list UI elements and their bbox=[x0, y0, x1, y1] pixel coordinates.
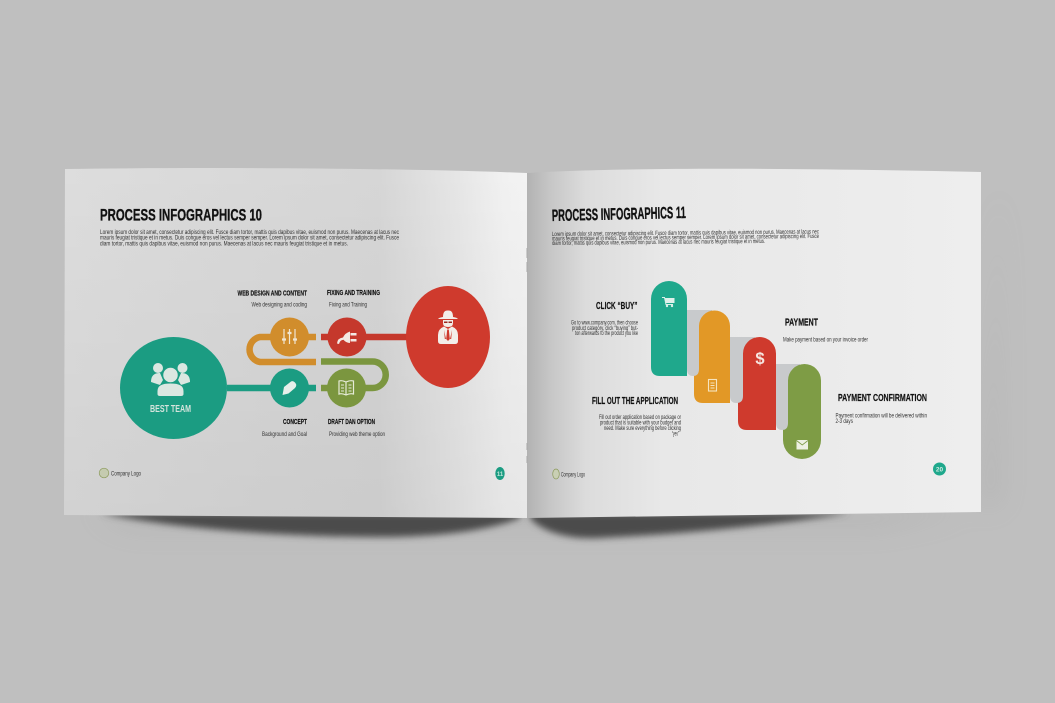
label: fixing and training: FIXING AND TRAINING bbox=[327, 290, 380, 297]
icon: hat and suit figure bbox=[438, 310, 458, 344]
label: web design and content: WEB DESIGN AND CONTENT bbox=[238, 290, 308, 298]
left company logo: Company Logo bbox=[111, 470, 141, 478]
right page number bbox=[933, 462, 946, 476]
label: concept: CONCEPT bbox=[283, 419, 308, 426]
label: concept: Background and Goal bbox=[262, 431, 307, 438]
left page number: 11 bbox=[497, 472, 504, 478]
label: click buy: ton afterwards to the product you like bbox=[575, 331, 638, 337]
icon: sliders bbox=[282, 329, 297, 344]
icon: envelope bbox=[796, 440, 808, 450]
right page intro text: Lorem ipsum dolor sit amet, consectetur adipiscing elit. Fusce diam tortor, mattis quis dapibus vitae, euismod non purus. Maecenas at lacus nec bbox=[552, 228, 819, 238]
right page number: 20 bbox=[936, 466, 943, 474]
icon: pencil bbox=[282, 381, 296, 395]
right company logo bbox=[553, 469, 585, 479]
shadow under left page bbox=[100, 513, 520, 537]
label: payment bbox=[783, 318, 869, 344]
step 3: payment, red bbox=[738, 337, 776, 430]
label: payment confirmation: Payment confirmation will be delivered within bbox=[836, 412, 927, 420]
soft page shadow bbox=[90, 180, 1000, 528]
connector fronts, grey bbox=[687, 330, 699, 376]
label: fixing and training: Fixing and Training bbox=[329, 301, 367, 308]
left page intro text bbox=[100, 229, 399, 247]
left page intro text: Lorem ipsum dolor sit amet, consectetur adipiscing elit. Fusce diam tortor, mattis quis dapibus vitae, euismod non purus. Maecenas at lacus nec bbox=[100, 229, 399, 236]
label: fill out the application: need. Make sure everything before clicking bbox=[604, 426, 681, 432]
label: web design and content: Web designing and coding bbox=[252, 301, 307, 308]
label: payment confirmation bbox=[836, 393, 927, 425]
label: click buy bbox=[571, 301, 638, 337]
label: fixing and training bbox=[327, 290, 380, 308]
right page heading: PROCESS INFOGRAPHICS 11 bbox=[552, 204, 686, 225]
label: web design and content bbox=[238, 290, 308, 308]
left company logo bbox=[99, 468, 141, 478]
left page number bbox=[495, 467, 505, 480]
label: payment: PAYMENT bbox=[785, 318, 818, 328]
icon: document bbox=[708, 380, 716, 391]
label: click buy: Go to www.company.com, then choose bbox=[571, 320, 638, 326]
right page intro text bbox=[552, 228, 819, 247]
label: draft dan option: DRAFT DAN OPTION bbox=[328, 419, 375, 426]
left page intro text: diam tortor, mattis quis dapibus vitae, euismod non purus. Maecenas at lacus nec mauris feugiat tristique et in metus. bbox=[100, 240, 348, 247]
right page intro text: diam tortor, mattis quis dapibus vitae, euismod non purus. Maecenas at lacus nec mauris feugiat tristique et in metus. bbox=[552, 238, 765, 247]
connector backs, grey bbox=[687, 310, 800, 395]
label: draft dan option bbox=[328, 419, 385, 438]
label: payment: Make payment based on your invoice order bbox=[783, 336, 869, 344]
circle: best team: BEST TEAM bbox=[150, 403, 191, 415]
icon: plug bbox=[337, 332, 356, 344]
circle: draft step bbox=[327, 368, 366, 408]
circle: plug step bbox=[328, 318, 366, 356]
circle: best team bbox=[120, 337, 227, 439]
binding marks bbox=[526, 248, 528, 463]
label: draft dan option: Providing web theme option bbox=[329, 431, 385, 438]
label: fill out the application: Fill out order application based on package or bbox=[599, 415, 681, 421]
label: fill out the application: “yes” bbox=[672, 432, 679, 438]
circle: concept step bbox=[270, 368, 309, 408]
label: fill out the application: FILL OUT THE APPLICATION bbox=[592, 396, 678, 407]
step 1: click buy, teal bbox=[651, 281, 687, 376]
right page bbox=[527, 169, 981, 518]
circle: spy target bbox=[406, 286, 490, 388]
circle: settings step bbox=[270, 318, 309, 356]
label: click buy: CLICK “BUY” bbox=[596, 301, 638, 312]
icon: open book bbox=[339, 381, 354, 395]
ribbon staircase chart bbox=[651, 281, 821, 459]
process flow connectors bbox=[227, 337, 410, 388]
step 4: confirmation, olive bbox=[783, 364, 821, 459]
label: fill out the application: product that is suitable with your budget and bbox=[600, 420, 681, 426]
label: fill out the application bbox=[592, 396, 681, 438]
right company logo: Company Logo bbox=[561, 472, 585, 478]
icon: cart bbox=[662, 298, 674, 307]
left page bbox=[64, 168, 527, 518]
right page intro text: mauris feugiat tristique et in metus. Duis congue eros vel lectus semper semper. Lorem ipsum dolor sit amet, consectetur adipiscing elit. Fusce bbox=[552, 233, 819, 242]
label: concept bbox=[262, 419, 308, 438]
step 2: fill out application, orange bbox=[694, 310, 730, 403]
label: click buy: product category, click “buying” but- bbox=[572, 326, 638, 332]
label: payment confirmation: 2-3 days bbox=[836, 418, 853, 425]
icon: team bbox=[151, 363, 190, 396]
page vertical shading bbox=[64, 168, 527, 518]
icon: dollar sign: $ bbox=[755, 350, 765, 368]
left page heading: PROCESS INFOGRAPHICS 10 bbox=[100, 206, 262, 224]
label: payment confirmation: PAYMENT CONFIRMATION bbox=[838, 393, 927, 404]
shadow under right page bbox=[530, 513, 850, 538]
left page intro text: mauris feugiat tristique et in metus. Duis congue eros vel lectus semper semper. Lorem ipsum dolor sit amet, consectetur adipiscing elit. Fusce bbox=[100, 234, 399, 242]
